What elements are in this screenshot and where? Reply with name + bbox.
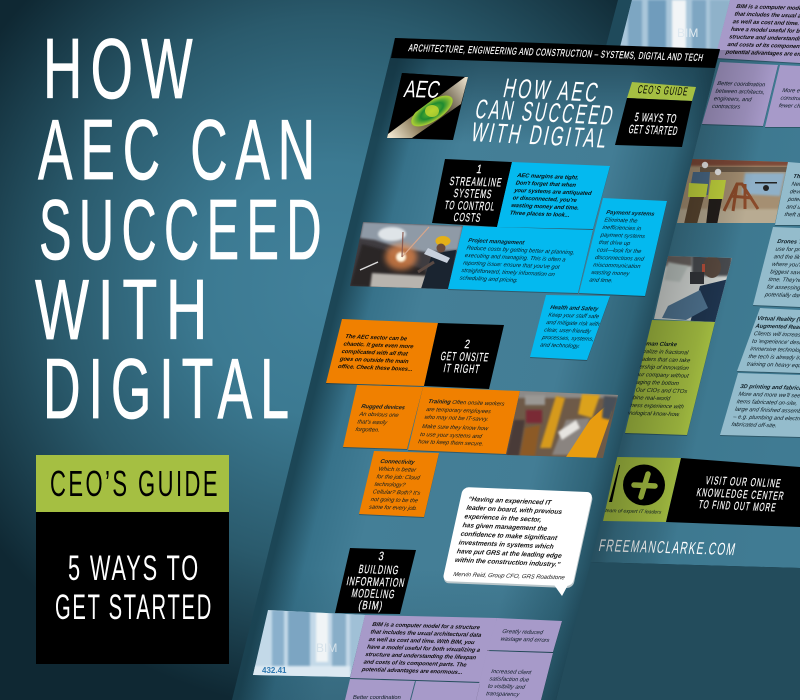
headline: DIGITAL xyxy=(43,342,297,437)
panel: drones xyxy=(753,227,800,307)
headline xyxy=(35,22,329,437)
panel: section 1 intro: Don't forget that when xyxy=(515,181,577,189)
panel: 3D printing: fabricated off-site. xyxy=(731,422,777,429)
panel: payment systems: and time. xyxy=(589,278,614,284)
panel: rugged devices xyxy=(343,385,423,449)
section 1 heading: TO CONTROL xyxy=(443,198,497,213)
panel: connectivity: for the job: Cloud xyxy=(376,474,421,481)
panel: Freeman Clarke about: ownership of innovation xyxy=(628,364,689,372)
icon: AEC spirit level logo: AEC xyxy=(402,76,443,104)
panel: more efficient xyxy=(411,681,480,700)
panel: connectivity: Cellular? Both? It's xyxy=(372,489,421,497)
panel: health and safety xyxy=(530,295,610,360)
panel: Freeman Clarke about xyxy=(618,320,715,435)
photo: BIM skyline, top: BIM xyxy=(677,26,698,40)
panel: payment systems: wasting money xyxy=(591,270,631,277)
title: HOW AEC xyxy=(501,72,603,108)
panel: drones: for assessing xyxy=(766,285,800,292)
badge: CEO's guide, large xyxy=(36,455,229,664)
panel: better coordination: engineers, and xyxy=(713,96,753,103)
badge: CEO's guide: 5 WAYS TO xyxy=(633,110,678,126)
panel: project management: Reduce costs by getting better at planning, xyxy=(466,246,575,256)
panel: section 2 intro: office. Check these boxes... xyxy=(337,364,414,373)
panel: Freeman Clarke about: technological know-how. xyxy=(618,410,681,418)
section 1 heading: 1 xyxy=(475,162,483,176)
panel: training: who may not be IT-savvy. xyxy=(424,415,489,423)
callout: client quote: experience in the sector, xyxy=(464,513,542,524)
panel: better coordination xyxy=(345,679,415,700)
panel: better coordination: contractors xyxy=(711,104,741,111)
panel: payment systems: Payment systems xyxy=(606,210,656,218)
callout: client quote: have put GRS at the leading edge xyxy=(456,548,563,560)
panel: client satisfaction xyxy=(475,651,553,700)
badge: CEO's guide, large: CEO’S GUIDE xyxy=(50,463,220,504)
section 2 heading: IT RIGHT xyxy=(442,361,482,376)
panel: payment systems: miscommunication xyxy=(592,263,641,270)
panel: connectivity: Which is better xyxy=(378,467,418,474)
icon: plus in circle xyxy=(623,464,665,506)
call to action: knowledge center: team of expert IT leaders xyxy=(605,508,662,516)
panel: rugged devices: Rugged devices xyxy=(361,404,406,411)
panel: better coordination xyxy=(702,62,778,126)
panel: payment systems: cost—look for the xyxy=(596,248,642,255)
panel: client satisfaction: to visibility and xyxy=(487,684,526,691)
panel: payment systems: Eliminate the xyxy=(604,218,638,225)
panel: section 1 intro: your systems are antiquated xyxy=(513,188,592,197)
panel: connectivity xyxy=(359,451,439,517)
badge: CEO's guide xyxy=(615,82,696,147)
panel: BIM intro xyxy=(350,615,497,682)
back page: services and contact xyxy=(556,0,800,700)
photo: drone inspection xyxy=(677,159,788,223)
headline: HOW xyxy=(43,22,201,117)
section 1 heading: COSTS xyxy=(452,210,483,225)
panel: payment systems: inefficiencies in xyxy=(602,225,642,232)
panel: BIM intro: that includes the usual architectural data xyxy=(370,630,483,639)
panel: health and safety: Keep your staff safe xyxy=(547,313,600,320)
panel: training: to use your systems and xyxy=(419,432,483,440)
callout: client quote: leader on board, with previous xyxy=(466,505,563,516)
panel: project management: straightforward, timely information on xyxy=(461,268,555,278)
photo: BIM skyline: 432.41 xyxy=(262,666,287,675)
panel: client satisfaction: transparency xyxy=(485,691,521,698)
photo: engineer at sunrise xyxy=(350,222,463,289)
panel: training: how to keep them secure. xyxy=(417,439,484,448)
main infographic page xyxy=(232,38,720,700)
callout: client quote: confidence to make significant xyxy=(460,531,558,542)
section 1 heading xyxy=(432,159,512,227)
panel: training: are temporary employees xyxy=(426,407,492,415)
panel: section 2 intro xyxy=(326,319,438,386)
panel: rugged devices: An obvious one xyxy=(358,412,399,419)
photo: BIM skyline, top xyxy=(620,0,730,49)
callout: client quote: Mervin Reid, Group CFO, GRS Roadstone xyxy=(453,572,566,581)
panel: more efficient construction xyxy=(765,65,800,127)
panel: section 1 intro: or disconnected, you're xyxy=(512,196,578,204)
section 3 heading: INFORMATION xyxy=(345,574,407,590)
call to action: knowledge center xyxy=(603,457,800,527)
callout: client quote: within the construction industry.” xyxy=(454,557,562,569)
panel: reduced wastage: Greatly reduced xyxy=(502,629,544,636)
panel: internet of things xyxy=(775,162,800,225)
panel: rugged devices: forgotten. xyxy=(355,427,380,434)
panel: Freeman Clarke about: Freeman Clarke xyxy=(634,341,678,348)
section 1 heading: SYSTEMS xyxy=(452,186,494,201)
panel: health and safety: and technology. xyxy=(539,343,581,350)
title: WITH DIGITAL xyxy=(469,116,612,154)
panel: project management: reporting issue: ensure that you've got xyxy=(462,261,560,271)
panel: Freeman Clarke about: in your company without xyxy=(626,372,690,380)
panel: Freeman Clarke about: line. Our CIOs and CTOs xyxy=(623,387,688,395)
panel: payment systems: payment systems xyxy=(599,233,646,240)
panel: better coordination: Better coordination xyxy=(717,81,766,88)
callout: client quote: “Having an experienced IT xyxy=(468,496,553,507)
panel: payment systems: that drive up xyxy=(598,240,632,247)
panel: health and safety: processes, systems, xyxy=(540,335,595,343)
panel: 3D printing xyxy=(720,373,800,437)
section 2 heading xyxy=(424,323,504,389)
panel: connectivity: Connectivity xyxy=(380,459,416,466)
section 3 heading: 3 xyxy=(377,549,385,563)
section 3 heading: (BIM) xyxy=(357,598,385,613)
panel: training: Training Often onsite workers xyxy=(428,399,505,408)
title: CAN SUCCEED xyxy=(473,93,618,131)
panel: project management: scheduling and pricing. xyxy=(459,276,518,284)
panel: payment systems: disconnections and xyxy=(594,255,645,263)
panel: project management xyxy=(448,226,593,293)
panel: reduced wastage xyxy=(487,618,562,652)
panel: BIM intro: have a model useful for both visualizing a xyxy=(366,645,481,654)
header band xyxy=(391,38,720,68)
icon: AEC spirit level logo xyxy=(387,73,468,140)
panel: connectivity: not going to be the xyxy=(370,497,419,504)
badge: CEO's guide, large: GET STARTED xyxy=(55,588,213,627)
panel: section 2 intro: goes on outside the main xyxy=(338,357,410,365)
panel: BIM intro: as well as cost and time. With BIM, you xyxy=(368,637,475,646)
photo: executive at desk xyxy=(654,256,732,322)
panel: Freeman Clarke about: business experience with xyxy=(619,403,684,410)
panel: Freeman Clarke about: IT leaders that can take xyxy=(630,356,691,364)
callout: client quote: investments in systems which xyxy=(458,540,554,551)
panel: BIM intro: and costs of its component parts. The xyxy=(363,660,468,669)
photo: BIM skyline: BIM xyxy=(316,641,337,655)
section 2 heading: GET ONSITE xyxy=(439,349,491,364)
panel: Freeman Clarke about: combine real-world xyxy=(621,395,671,402)
panel: section 1 intro: Three places to look... xyxy=(509,211,570,219)
panel: reduced wastage: wastage and errors xyxy=(500,637,550,644)
title xyxy=(469,72,618,154)
panel: training: Make sure they know how xyxy=(421,424,489,432)
panel: health and safety: Health and Safety xyxy=(549,305,600,313)
badge: CEO's guide: GET STARTED xyxy=(627,122,679,138)
panel: BIM intro: structure and understanding the lifespan xyxy=(365,652,477,661)
panel: section 2 intro: The AEC sector can be xyxy=(345,334,408,342)
panel: virtual reality xyxy=(737,308,800,373)
section 2 heading: 2 xyxy=(463,337,471,351)
panel: client satisfaction: satisfaction due xyxy=(489,676,530,684)
panel: payment systems xyxy=(579,198,667,296)
photo: construction site xyxy=(506,391,618,458)
panel: 3D printing: items fabricated on-site, xyxy=(736,399,798,407)
section 3 heading: MODELING xyxy=(350,586,397,601)
panel: 3D printing: More and more we'll see xyxy=(738,392,800,399)
panel: health and safety: and mitigate risk with xyxy=(545,320,600,328)
panel: better coordination: between architects, xyxy=(715,89,765,96)
panel: project management: Project management xyxy=(468,238,526,247)
panel: Freeman Clarke about: damaging the bottom xyxy=(625,380,680,387)
photo: BIM skyline xyxy=(253,610,365,677)
panel: section 1 intro: AEC margins are tight. xyxy=(516,173,580,181)
callout: client quote: has given management the xyxy=(462,522,548,533)
badge: CEO's guide, large: 5 WAYS TO xyxy=(68,549,200,588)
panel: section 2 intro: chaotic. It gets even more xyxy=(343,342,415,350)
panel: rugged devices: that's easily xyxy=(357,419,389,426)
panel: section 1 intro xyxy=(497,162,610,229)
panel: section 1 intro: wasting money and time. xyxy=(511,203,580,212)
panel: health and safety: clear, user-friendly xyxy=(543,328,592,335)
section 3 heading: BUILDING xyxy=(357,562,401,577)
panel: connectivity: technology? xyxy=(374,482,407,489)
headline: WITH xyxy=(35,263,216,358)
panel: training xyxy=(408,387,520,454)
panel: project management: executing and managing. This is often a xyxy=(464,253,567,264)
panel: section 2 intro: complicated with all that xyxy=(341,349,409,358)
section 1 heading: STREAMLINE xyxy=(448,174,504,190)
callout: client quote xyxy=(442,487,594,596)
panel: BIM intro: potential advantages are enormous... xyxy=(360,667,463,676)
panel: client satisfaction: Increased client xyxy=(491,669,532,676)
panel: BIM summary repeated xyxy=(715,0,800,63)
panel: Freeman Clarke about: specialize in fractional xyxy=(632,349,690,356)
section 3 heading xyxy=(335,548,416,614)
panel: connectivity: same for every job. xyxy=(368,505,418,512)
headline: SUCCEED xyxy=(39,183,329,278)
panel: BIM intro: BIM is a computer model for a structure xyxy=(372,622,481,631)
badge: CEO's guide: CEO’S GUIDE xyxy=(636,83,690,98)
headline: AEC CAN xyxy=(38,103,323,198)
